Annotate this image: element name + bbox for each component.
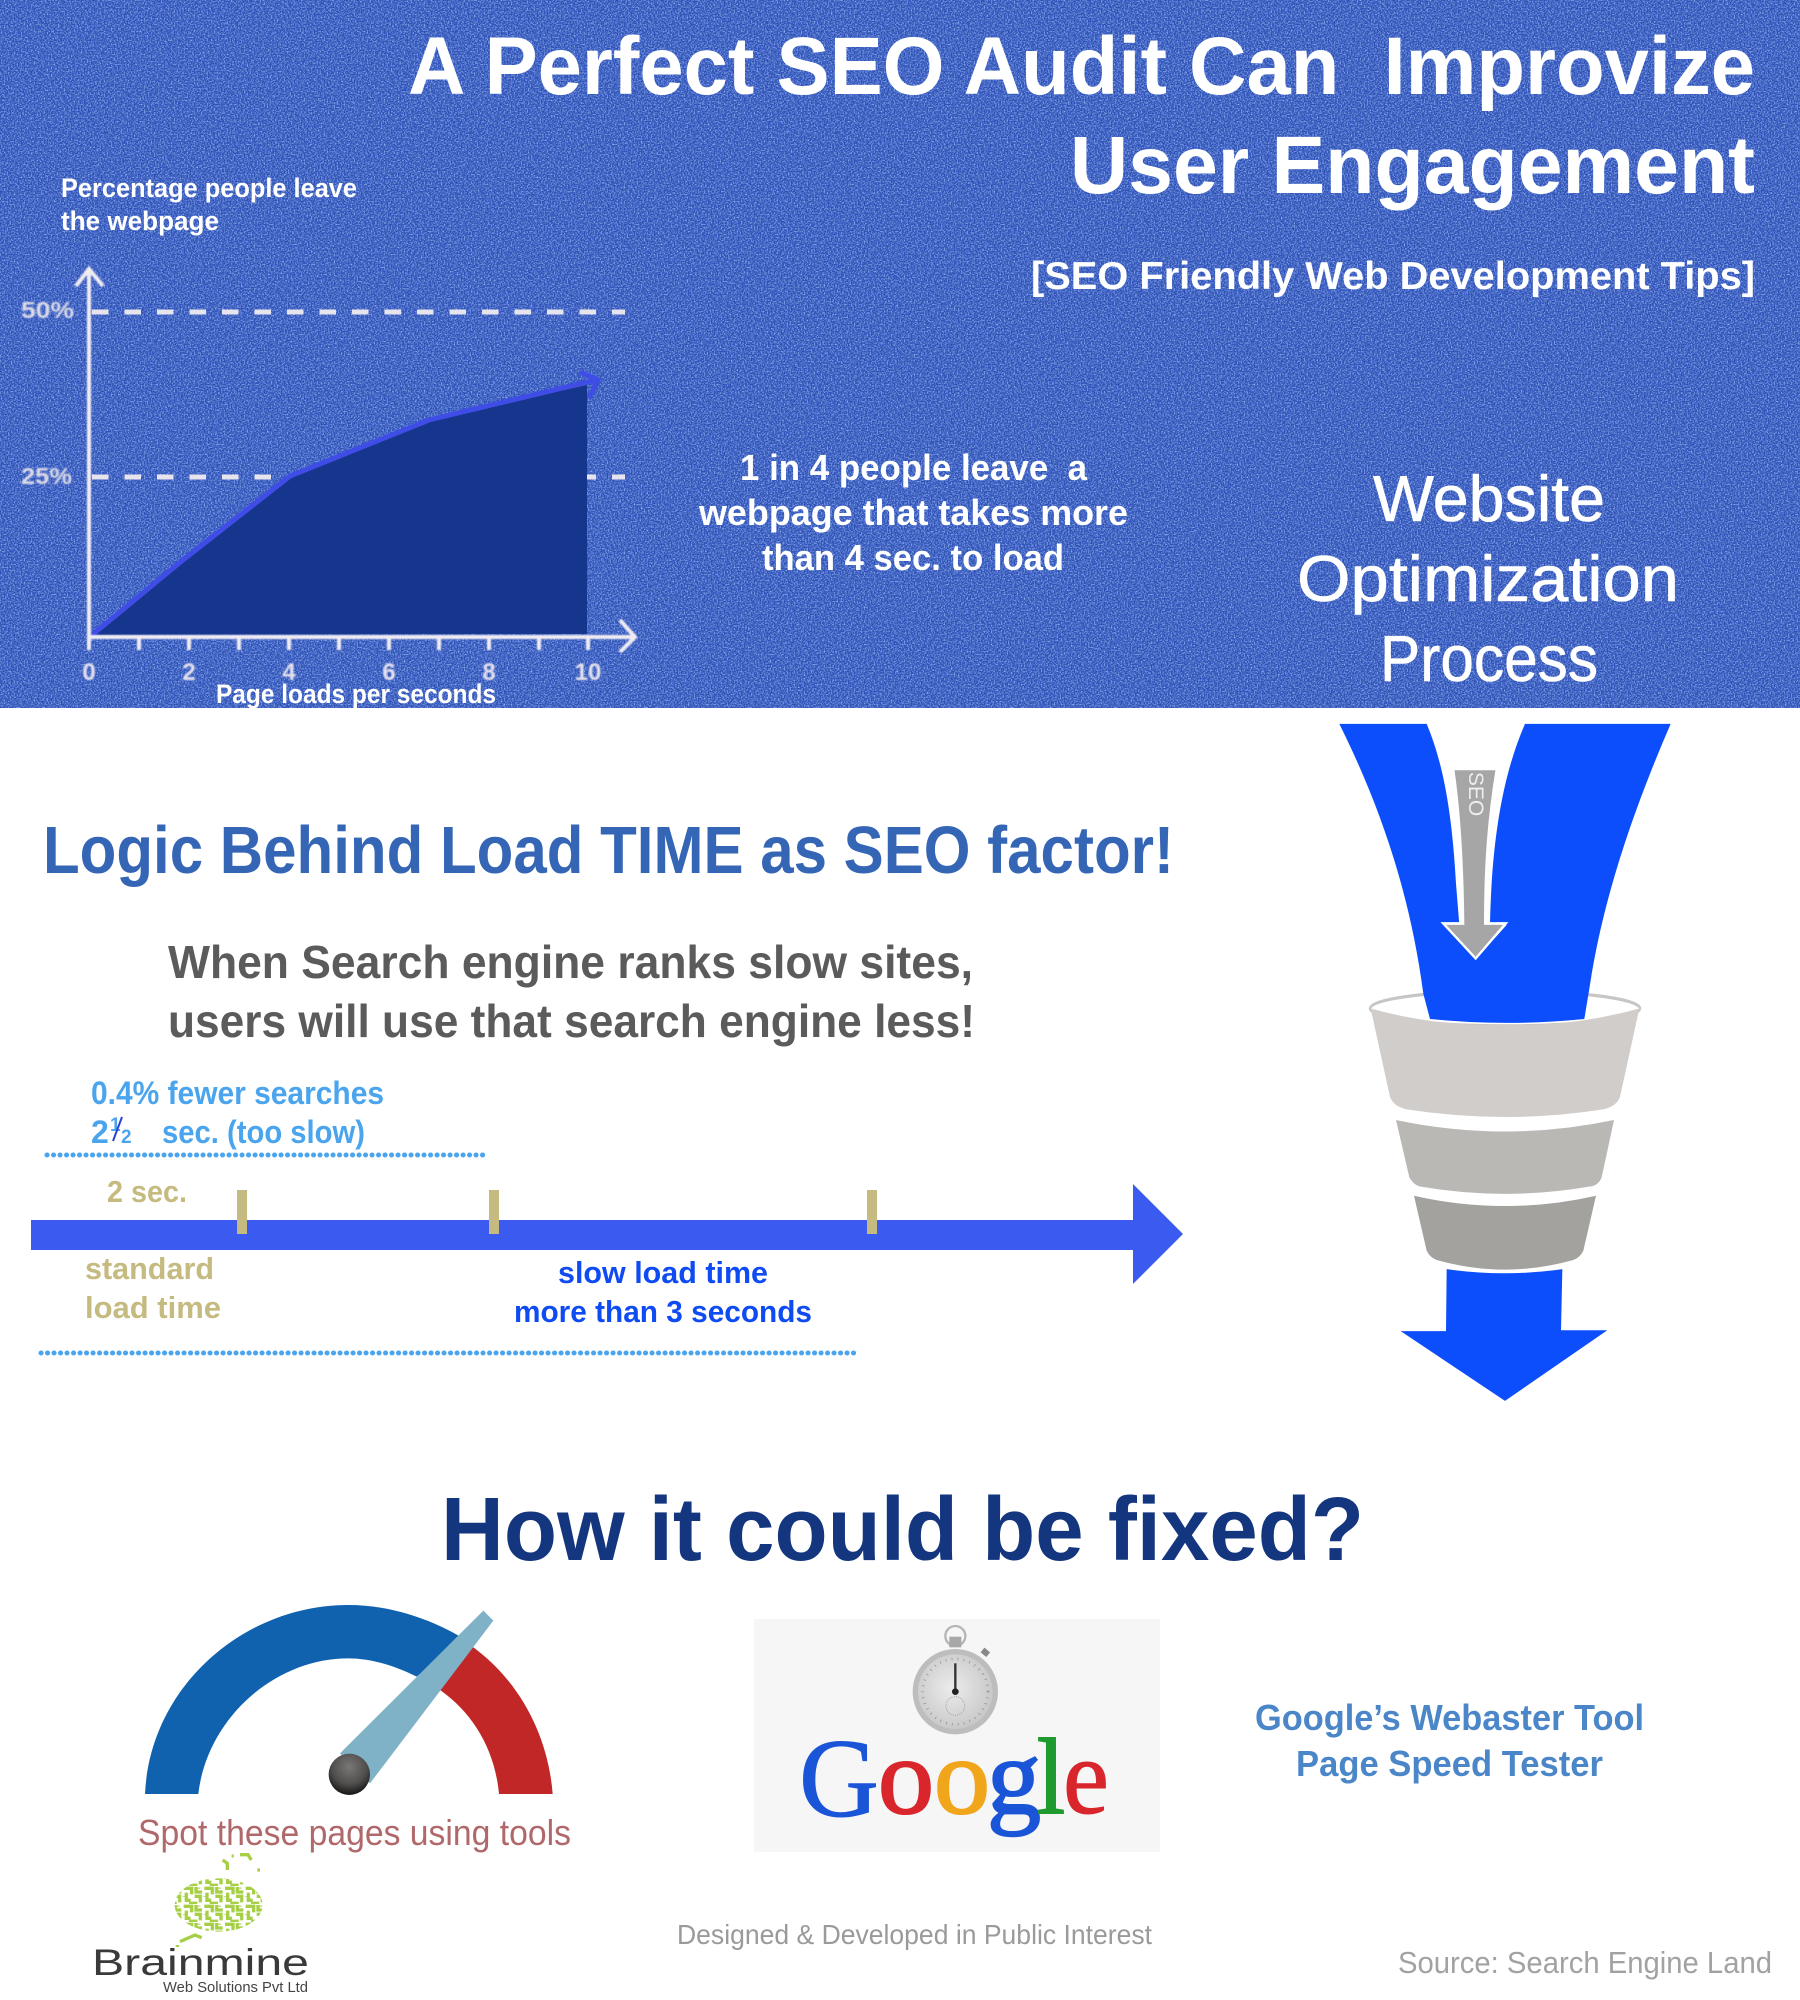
text: too slow note: sec. (too slow) xyxy=(162,1114,365,1150)
chart: percentage people leave the webpage xyxy=(21,173,635,709)
text: designed and developed: Designed & Developed in Public Interest xyxy=(677,1919,1152,1950)
google wordmark: o xyxy=(934,1718,990,1837)
title: User Engagement xyxy=(1070,120,1755,211)
timeline xyxy=(31,1075,1183,1353)
callout: 1 in 4 people: 1 in 4 people leave a xyxy=(740,447,1088,488)
text: slow load time: slow load time xyxy=(558,1255,768,1290)
timeline arrow xyxy=(31,1184,1183,1284)
heading: website optimization process: Process xyxy=(1380,622,1598,695)
callout: 1 in 4 people xyxy=(698,447,1128,578)
dashed reference lines xyxy=(92,312,625,477)
chart heading: Percentage people leave xyxy=(61,173,357,203)
y axis labels: 25% xyxy=(21,463,72,489)
logo: brainmine xyxy=(92,1855,309,1996)
heading: website optimization process xyxy=(1297,462,1679,695)
text: too slow note: 2 xyxy=(91,1114,109,1150)
x axis labels: 4 xyxy=(282,659,296,686)
google wordmark: l xyxy=(1037,1718,1065,1837)
x axis labels: 2 xyxy=(182,659,196,686)
gauge needle xyxy=(340,1611,493,1783)
text: too slow note: 0.4% fewer searches xyxy=(91,1075,384,1111)
panel: google page speed image xyxy=(754,1619,1160,1852)
x axis labels: 0 xyxy=(82,659,96,686)
area under curve xyxy=(92,385,587,635)
text: too slow note: 2 xyxy=(121,1127,132,1148)
text: 2 sec: 2 sec. xyxy=(107,1174,187,1209)
text: when search engine ranks slow sites: When Search engine ranks slow sites, xyxy=(168,936,973,988)
text: when search engine ranks slow sites: users will use that search engine less! xyxy=(168,995,975,1047)
text: standard load time: load time xyxy=(85,1290,221,1325)
callout: 1 in 4 people: than 4 sec. to load xyxy=(762,537,1064,578)
callout: 1 in 4 people: webpage that takes more xyxy=(698,492,1128,533)
gauge blue arc xyxy=(145,1605,463,1794)
text: google webmaster tool xyxy=(1255,1697,1644,1784)
brain icon xyxy=(174,1855,263,1947)
blue incoming traffic xyxy=(1339,724,1671,1023)
title xyxy=(408,21,1755,211)
axes xyxy=(76,269,635,652)
dotted divider lower xyxy=(41,1350,860,1356)
icon: stopwatch xyxy=(913,1626,998,1734)
funnel top opening xyxy=(1370,991,1640,1026)
chart heading xyxy=(61,173,357,236)
timeline ticks xyxy=(237,1190,877,1234)
text: google webmaster tool: Google’s Webaster Tool xyxy=(1255,1697,1644,1738)
subtitle: [SEO Friendly Web Development Tips] xyxy=(1031,255,1755,298)
curve with arrow xyxy=(92,372,598,635)
gauge knob xyxy=(329,1754,370,1795)
google wordmark xyxy=(799,1717,1109,1841)
google wordmark: o xyxy=(878,1718,934,1837)
x axis labels: 6 xyxy=(382,659,396,686)
gauge red arc xyxy=(440,1645,553,1794)
text: slow load time xyxy=(514,1255,812,1329)
text: standard load time: standard xyxy=(85,1251,214,1286)
text: spot these pages: Spot these pages using tools xyxy=(138,1812,571,1853)
text: slow load time: more than 3 seconds xyxy=(514,1294,812,1329)
text: source: Source: Search Engine Land xyxy=(1398,1945,1772,1980)
chart heading: the webpage xyxy=(61,206,219,236)
y axis labels xyxy=(21,297,74,489)
wordmark: Brainmine xyxy=(92,1942,309,1983)
text: standard load time xyxy=(85,1251,221,1325)
google wordmark: G xyxy=(799,1717,879,1841)
funnel ring 1 xyxy=(1371,1008,1639,1117)
x axis labels: 8 xyxy=(482,659,496,686)
google wordmark: g xyxy=(987,1718,1041,1837)
grey SEO arrow xyxy=(1443,769,1506,958)
heading: website optimization process: Website xyxy=(1373,462,1605,535)
icon: speed gauge xyxy=(145,1605,553,1795)
funnel ring 3 xyxy=(1414,1196,1596,1270)
x axis title: Page loads per seconds xyxy=(216,679,496,709)
heading: how it could be fixed: How it could be fixed? xyxy=(441,1480,1364,1580)
SEO label: SEO xyxy=(1464,772,1487,816)
text: too slow note xyxy=(91,1075,384,1150)
y axis labels: 50% xyxy=(21,297,74,323)
x axis labels xyxy=(82,659,601,686)
panel: blue header banner xyxy=(0,0,1800,708)
funnel ring 2 xyxy=(1396,1120,1614,1194)
heading: website optimization process: Optimization xyxy=(1297,542,1679,615)
text: when search engine ranks slow sites xyxy=(168,936,975,1047)
blue outgoing arrow xyxy=(1401,1269,1607,1401)
title: A Perfect SEO Audit Can Improvize xyxy=(408,21,1755,112)
text: too slow note: 1 xyxy=(110,1115,121,1136)
tagline: Web Solutions Pvt Ltd xyxy=(163,1979,308,1996)
text: google webmaster tool: Page Speed Tester xyxy=(1296,1743,1603,1784)
dotted divider upper xyxy=(47,1152,484,1158)
icon: SEO funnel xyxy=(1339,724,1671,1401)
x axis labels: 10 xyxy=(575,659,601,686)
heading: logic behind load time: Logic Behind Load TIME as SEO factor! xyxy=(43,813,1174,888)
google wordmark: e xyxy=(1063,1718,1109,1837)
